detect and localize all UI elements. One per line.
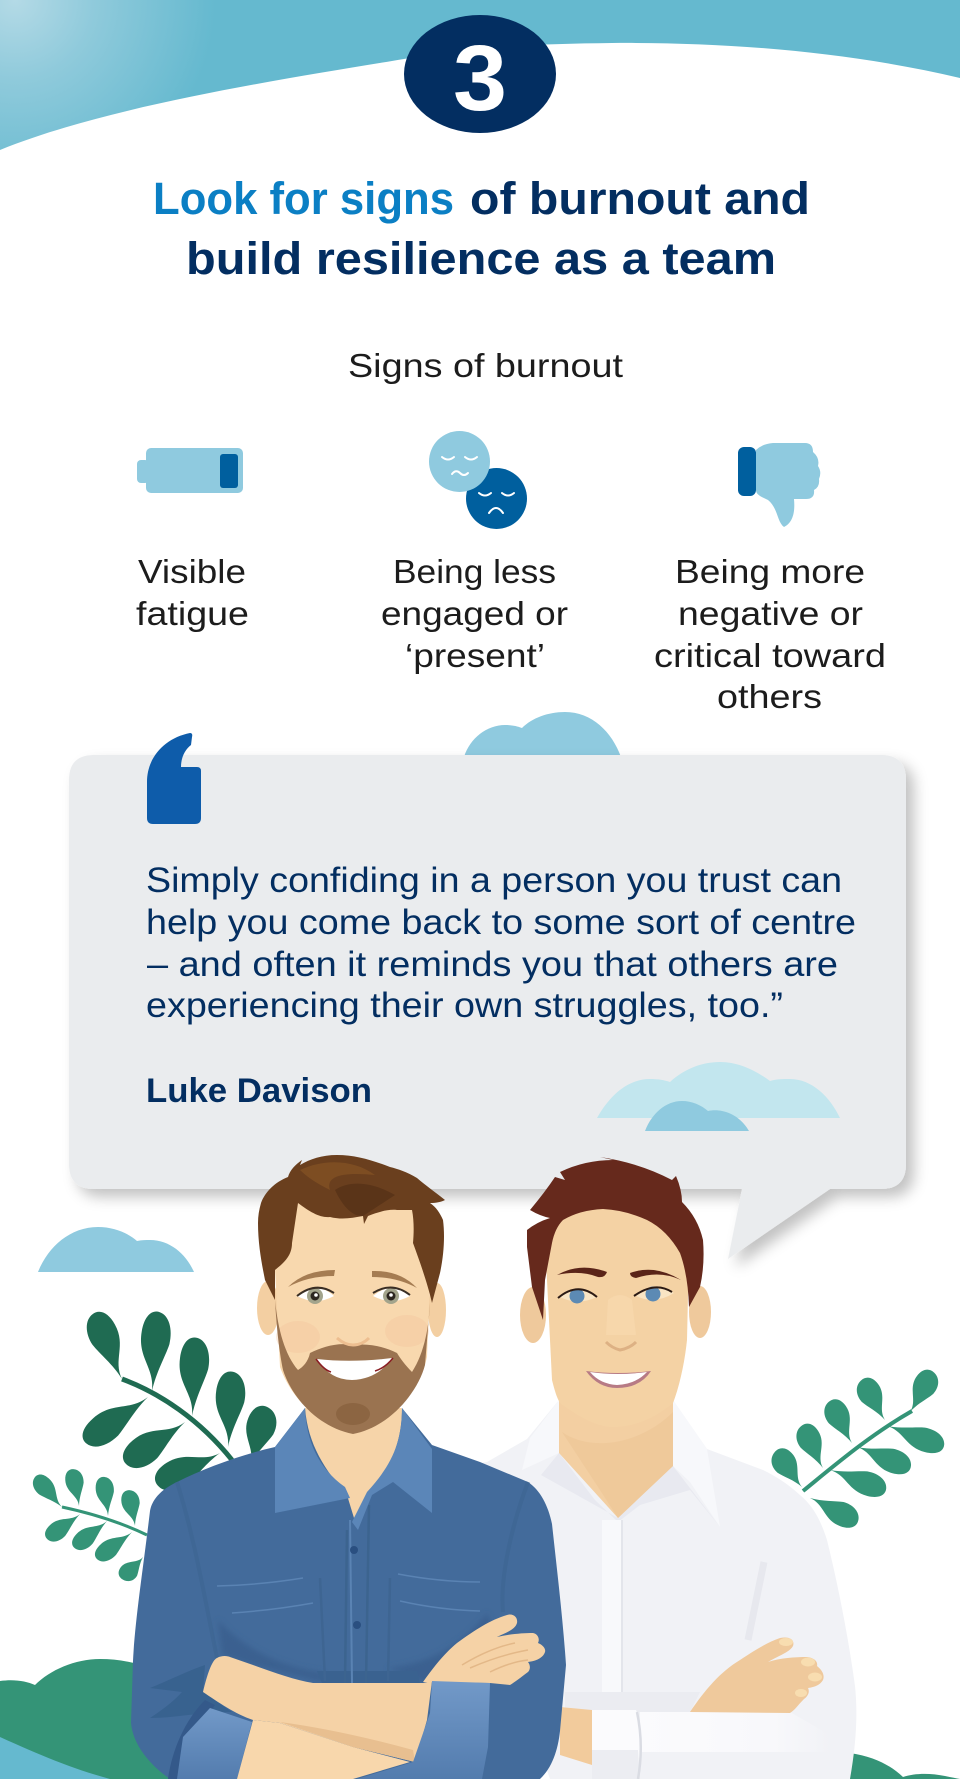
title: Look for signs xyxy=(153,173,454,224)
beard xyxy=(275,1300,430,1434)
label: less engaged: Being less xyxy=(393,553,556,590)
label: more negative: Being more xyxy=(675,553,865,590)
title: build resilience as a team xyxy=(186,233,776,284)
sign: more negative xyxy=(654,443,886,715)
icon: low battery xyxy=(137,448,243,493)
subheading: signs of burnout: Signs of burnout xyxy=(348,347,623,384)
illustration: man in blue shirt xyxy=(131,1155,566,1779)
eyes xyxy=(297,1287,410,1304)
hair xyxy=(258,1155,445,1303)
icon: thumbs down xyxy=(738,443,820,527)
blue shirt xyxy=(131,1408,566,1779)
blush xyxy=(276,1315,429,1353)
ground hills bottom right xyxy=(850,1753,960,1779)
clouds inside bubble xyxy=(597,1062,840,1131)
title xyxy=(153,173,810,284)
icon: two tired faces xyxy=(429,431,527,529)
face xyxy=(545,1200,689,1427)
neck xyxy=(559,1400,673,1518)
ground hills bottom left xyxy=(0,1659,170,1779)
ears xyxy=(257,1281,446,1337)
label: more negative: others xyxy=(717,678,822,715)
mouth xyxy=(310,1346,397,1380)
label: less engaged xyxy=(381,553,568,674)
cloud lower left xyxy=(38,1227,194,1272)
nose xyxy=(337,1338,369,1345)
quote text: help you come back to some sort of centre xyxy=(146,903,856,942)
ears xyxy=(520,1286,711,1343)
label: more negative: negative or xyxy=(678,595,863,632)
quote text: Simply confiding in a person you trust can xyxy=(146,861,842,900)
hair xyxy=(527,1157,704,1320)
label: less engaged: engaged or xyxy=(381,595,568,632)
face xyxy=(275,1190,430,1433)
label: more negative xyxy=(654,553,886,715)
icon: quotation mark xyxy=(147,733,201,824)
white shirt xyxy=(440,1400,856,1779)
collar xyxy=(275,1408,432,1530)
step number badge xyxy=(404,15,556,133)
goatee xyxy=(336,1403,370,1425)
nose xyxy=(606,1342,636,1350)
eyebrows xyxy=(288,1270,417,1288)
mouth xyxy=(586,1371,651,1388)
neck xyxy=(305,1408,402,1518)
eyebrows xyxy=(557,1268,681,1280)
dark green leaf branch xyxy=(77,1307,282,1498)
sign: visible fatigue xyxy=(136,448,249,632)
quote text: – and often it reminds you that others are xyxy=(147,945,838,984)
eyes xyxy=(558,1286,674,1304)
cloud above quote bubble xyxy=(464,712,621,757)
label: visible fatigue: fatigue xyxy=(136,595,249,632)
illustration: man in white shirt xyxy=(440,1157,856,1779)
title: of burnout and xyxy=(470,173,810,224)
quote attribution: Luke Davison xyxy=(146,1072,372,1110)
light green leaf branch left xyxy=(28,1469,148,1585)
step number badge: 3 xyxy=(453,26,507,130)
sign: less engaged xyxy=(381,431,568,674)
label: more negative: critical toward xyxy=(654,637,886,674)
label: less engaged: ‘present’ xyxy=(405,637,545,674)
quote speech bubble xyxy=(69,733,906,1259)
arm and hand xyxy=(177,1615,545,1779)
left hand xyxy=(560,1637,824,1765)
quote text: experiencing their own struggles, too.” xyxy=(146,986,783,1025)
label: visible fatigue xyxy=(136,553,249,632)
label: visible fatigue: Visible xyxy=(138,553,246,590)
top wave banner xyxy=(0,0,960,150)
quote text xyxy=(146,861,856,1025)
light green leaf branch right xyxy=(766,1365,947,1531)
